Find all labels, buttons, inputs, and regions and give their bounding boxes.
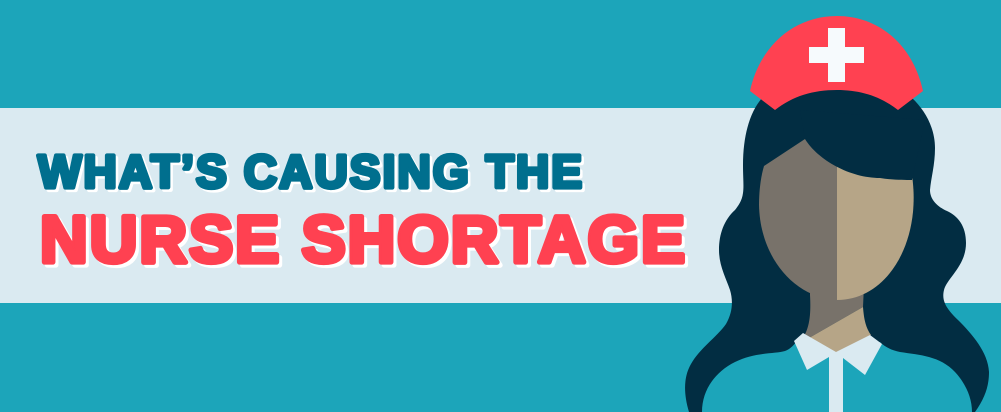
collar right bbox=[836, 335, 882, 375]
illustration: nurse bbox=[685, 16, 989, 412]
icon: medical cross bbox=[809, 28, 864, 82]
panel: light title band bbox=[0, 108, 1001, 303]
neck light bbox=[809, 307, 871, 353]
neck shadow bbox=[804, 285, 864, 338]
nurse body bbox=[702, 342, 972, 412]
face light half bbox=[837, 165, 914, 300]
heading: nurse shortage: NURSE SHORTAGE bbox=[40, 202, 685, 276]
heading: nurse shortage: NURSE SHORTAGE bbox=[43, 205, 688, 279]
nurse hair bbox=[685, 85, 989, 412]
heading: what's causing the: WHAT’S CAUSING THE bbox=[38, 146, 582, 198]
face shadow half bbox=[759, 139, 837, 300]
title bbox=[38, 146, 688, 279]
heading: what's causing the: WHAT’S CAUSING THE bbox=[40, 148, 584, 200]
shirt placket bbox=[829, 352, 843, 412]
hair fringe bbox=[800, 110, 925, 180]
collar left bbox=[794, 333, 836, 370]
nurse cap bbox=[750, 16, 923, 110]
